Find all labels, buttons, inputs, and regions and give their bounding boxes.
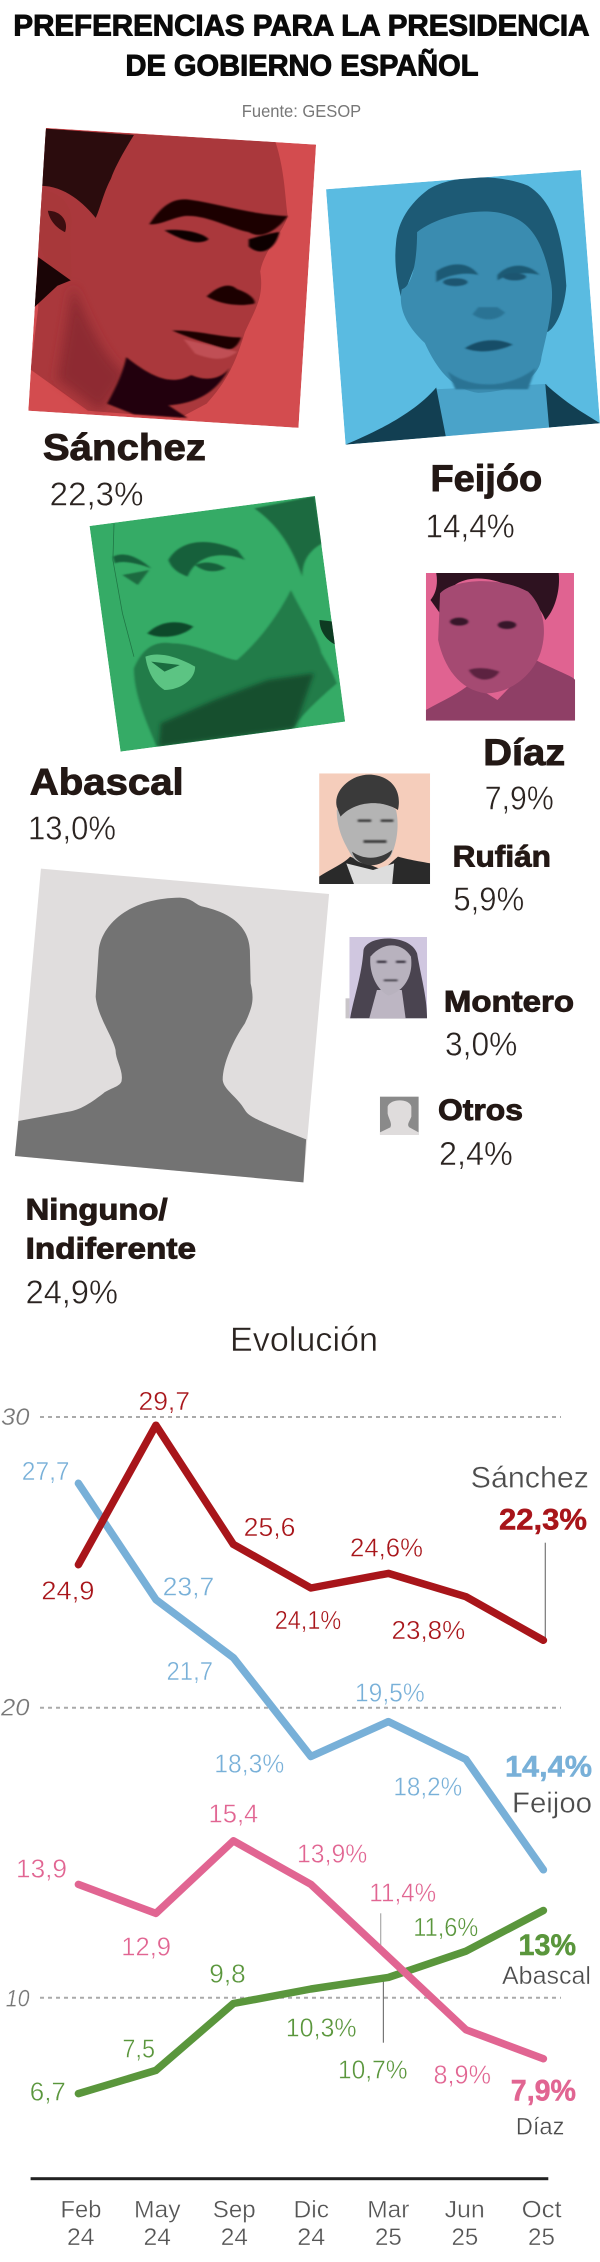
x axis line bbox=[31, 2177, 548, 2180]
values: Díaz: 13,9% bbox=[297, 1841, 367, 1869]
photo: Feijóo bbox=[326, 170, 600, 445]
label: Abascal: 13,0% bbox=[28, 809, 116, 846]
x axis labels: 24 bbox=[67, 2224, 94, 2251]
label: Sánchez: 22,3% bbox=[50, 475, 144, 512]
label: Otros: 2,4% bbox=[439, 1135, 513, 1172]
label: Ninguno / Indiferente: 24,9% bbox=[26, 1273, 118, 1310]
label: Feijóo: Feijóo bbox=[430, 458, 542, 499]
values: Díaz: 7,9% bbox=[511, 2075, 576, 2108]
label: Sánchez: Sánchez bbox=[43, 427, 206, 468]
values: Feijóo: 23,7 bbox=[163, 1574, 214, 1602]
label: Rufián: 5,9% bbox=[453, 881, 524, 918]
x axis labels: May bbox=[134, 2197, 181, 2224]
values: Sánchez: Sánchez bbox=[471, 1461, 589, 1494]
label: Montero: Montero bbox=[444, 985, 574, 1018]
values: Sánchez: 24,9 bbox=[41, 1577, 94, 1605]
label: Díaz: 7,9% bbox=[485, 779, 554, 816]
values: Díaz: 11,4% bbox=[369, 1880, 436, 1908]
label: Montero bbox=[444, 985, 574, 1063]
leader lines bbox=[381, 1543, 545, 2043]
photo: Díaz bbox=[426, 573, 575, 721]
x axis labels: Sep bbox=[213, 2197, 256, 2224]
label: Otros: Otros bbox=[438, 1094, 523, 1127]
values: Feijóo: Feijoo bbox=[512, 1787, 592, 1819]
photo: Montero bbox=[346, 937, 427, 1018]
values: Feijóo: 18,3% bbox=[214, 1750, 284, 1778]
values: Feijóo: 19,5% bbox=[355, 1680, 425, 1708]
y axis labels: 10 bbox=[6, 1986, 30, 2013]
label: Feijóo: 14,4% bbox=[426, 508, 515, 544]
label: Rufián: Rufián bbox=[453, 841, 551, 874]
photo: Sánchez bbox=[28, 128, 316, 428]
line: Feijóo bbox=[78, 1483, 543, 1870]
x axis labels: 25 bbox=[375, 2224, 402, 2251]
values: Abascal: 6,7 bbox=[30, 2079, 66, 2107]
values: Feijóo: 14,4% bbox=[505, 1751, 592, 1784]
photo: Rufián bbox=[319, 773, 430, 884]
photo: Abascal bbox=[90, 496, 345, 752]
label: Rufián bbox=[453, 841, 551, 918]
values: Sánchez bbox=[41, 1388, 589, 1645]
label: Ninguno / Indiferente bbox=[26, 1193, 196, 1310]
values: Abascal: 10,3% bbox=[286, 2015, 357, 2043]
x axis labels: 25 bbox=[452, 2224, 478, 2251]
x axis labels: Oct bbox=[522, 2197, 562, 2224]
values: Feijóo bbox=[22, 1458, 592, 1819]
x axis labels: Dic bbox=[294, 2197, 329, 2224]
values: Abascal: 13% bbox=[518, 1929, 576, 1962]
x axis labels: 24 bbox=[221, 2224, 248, 2251]
x axis labels bbox=[60, 2197, 562, 2251]
values: Sánchez: 29,7 bbox=[138, 1388, 190, 1416]
line: Díaz bbox=[78, 1841, 543, 2059]
label: Feijóo bbox=[426, 458, 542, 544]
values: Abascal: 9,8 bbox=[209, 1960, 246, 1988]
values: Sánchez: 25,6 bbox=[244, 1514, 295, 1542]
values: Abascal: 11,6% bbox=[413, 1914, 478, 1942]
values: Díaz: 12,9 bbox=[121, 1934, 171, 1962]
values: Díaz bbox=[16, 1801, 576, 2140]
label: Sánchez bbox=[43, 427, 206, 512]
values: Feijóo: 21,7 bbox=[166, 1658, 213, 1686]
values: Feijóo: 27,7 bbox=[22, 1458, 70, 1486]
title: PREFERENCIAS PARA LA PRESIDENCIA bbox=[13, 10, 589, 43]
photo: Otros silhouette bbox=[380, 1097, 419, 1135]
label: Ninguno / Indiferente: Indiferente bbox=[26, 1232, 196, 1265]
line: Sánchez bbox=[78, 1425, 543, 1640]
values: Abascal bbox=[30, 1914, 591, 2107]
photo: Ninguno / Indiferente silhouette bbox=[15, 869, 329, 1182]
values: Sánchez: 23,8% bbox=[392, 1617, 465, 1645]
values: Díaz: 15,4 bbox=[208, 1801, 258, 1829]
x axis labels: 24 bbox=[297, 2224, 325, 2251]
x axis labels: 25 bbox=[528, 2224, 555, 2251]
label: Ninguno / Indiferente: Ninguno/ bbox=[26, 1193, 168, 1226]
line chart: evolution of preferences bbox=[0, 1388, 592, 2251]
values: Abascal: 7,5 bbox=[122, 2036, 155, 2064]
title bbox=[13, 10, 589, 83]
y axis labels: 30 bbox=[1, 1404, 30, 1431]
label: Díaz: Díaz bbox=[483, 732, 565, 773]
label: Abascal: Abascal bbox=[30, 761, 184, 802]
x axis labels: Jun bbox=[445, 2197, 485, 2224]
y axis labels: 20 bbox=[0, 1695, 30, 1722]
values: Abascal: Abascal bbox=[502, 1962, 591, 1990]
label: Díaz bbox=[483, 732, 565, 816]
title: DE GOBIERNO ESPAÑOL bbox=[126, 49, 478, 83]
line: Abascal bbox=[78, 1910, 543, 2094]
source note: Fuente: GESOP bbox=[242, 101, 361, 121]
values: Díaz: 8,9% bbox=[434, 2061, 491, 2089]
x axis labels: 24 bbox=[144, 2224, 171, 2251]
values: Sánchez: 24,6% bbox=[350, 1535, 423, 1563]
values: Feijóo: 18,2% bbox=[393, 1774, 462, 1802]
values: Díaz: 13,9 bbox=[16, 1856, 67, 1884]
heading: Evolución: Evolución bbox=[230, 1321, 378, 1359]
values: Sánchez: 22,3% bbox=[499, 1503, 587, 1536]
label: Abascal bbox=[28, 761, 184, 846]
x axis labels: Mar bbox=[367, 2197, 409, 2224]
values: Abascal: 10,7% bbox=[338, 2056, 408, 2084]
label: Montero: 3,0% bbox=[445, 1026, 517, 1063]
values: Sánchez: 24,1% bbox=[275, 1607, 341, 1635]
label: Otros bbox=[438, 1094, 523, 1172]
values: Díaz: Díaz bbox=[516, 2113, 564, 2140]
x axis labels: Feb bbox=[60, 2197, 101, 2224]
y axis labels bbox=[0, 1404, 30, 2013]
